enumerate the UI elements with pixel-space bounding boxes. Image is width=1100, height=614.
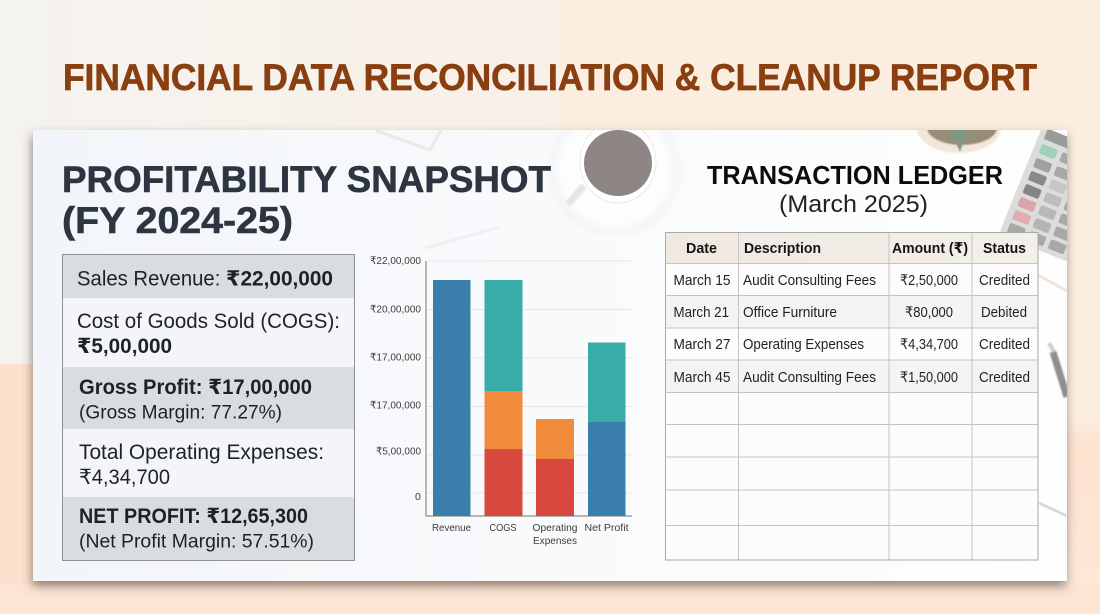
- table row: March 21: Office Furniture: [743, 305, 837, 321]
- table row: March 27: Operating Expenses: [743, 337, 864, 353]
- heading: profitability snapshot: PROFITABILITY SNAPSHOT: [62, 159, 551, 200]
- table row: March 27: Credited: [979, 337, 1030, 353]
- table header: Description: [744, 240, 821, 257]
- main panel: [33, 103, 1100, 581]
- bar chart: [370, 255, 632, 547]
- metric: gross profit: Gross Profit: ₹17,00,000: [79, 376, 312, 399]
- metric: gross profit: (Gross Margin: 77.27%): [79, 402, 282, 424]
- metric: cost of goods sold: Cost of Goods Sold (COGS):: [77, 310, 340, 333]
- table row: March 45: March 45: [674, 370, 730, 386]
- metric: cost of goods sold: ₹5,00,000: [77, 335, 172, 358]
- heading: transaction ledger: [707, 160, 1003, 218]
- table row: March 27: ₹4,34,700: [900, 337, 958, 353]
- bar: COGS: [484, 280, 522, 516]
- metric: net profit: NET PROFIT: ₹12,65,300: [79, 505, 308, 528]
- x axis labels: [432, 522, 629, 547]
- metric: cost of goods sold: [77, 310, 340, 358]
- y axis labels: ₹5,00,000: [376, 446, 421, 458]
- table row: March 21: [674, 305, 1027, 321]
- table row: March 15: [674, 273, 1030, 289]
- metric: sales revenue: Sales Revenue:: [77, 268, 226, 290]
- table row: March 45: ₹1,50,000: [900, 370, 958, 386]
- metric: sales revenue: ₹22,00,000: [226, 268, 333, 290]
- x axis labels: Operating: [532, 522, 578, 534]
- bar: operating expenses: [536, 419, 574, 516]
- table row: March 15: Audit Consulting Fees: [743, 273, 876, 289]
- panel: profitability metrics: [62, 254, 354, 560]
- heading: profitability snapshot: (FY 2024-25): [62, 200, 293, 241]
- bar: revenue: [433, 280, 470, 516]
- y axis labels: ₹22,00,000: [370, 255, 421, 267]
- icon: pen and paper: [1038, 275, 1067, 516]
- table row: March 45: Credited: [979, 370, 1030, 386]
- table row: March 45: Audit Consulting Fees: [743, 370, 876, 386]
- x axis labels: COGS: [490, 522, 516, 534]
- table: transaction ledger: [666, 232, 1038, 560]
- y axis labels: 0: [415, 491, 421, 503]
- x axis labels: Revenue: [432, 522, 471, 534]
- table header: Status: [983, 240, 1026, 257]
- title: FINANCIAL DATA RECONCILIATION & CLEANUP REPORT: [63, 57, 1037, 98]
- table row: March 15: ₹2,50,000: [900, 273, 958, 289]
- metric: total operating expenses: ₹4,34,700: [79, 466, 170, 489]
- y axis labels: [370, 255, 421, 503]
- metric: net profit: (Net Profit Margin: 57.51%): [79, 532, 314, 552]
- heading: transaction ledger: (March 2025): [779, 191, 928, 218]
- bar: net profit: [588, 342, 626, 516]
- y axis labels: ₹20,00,000: [370, 304, 421, 316]
- table row: March 15: March 15: [674, 273, 730, 289]
- table row: March 27: March 27: [674, 337, 730, 353]
- icon: calculator: [1000, 130, 1067, 261]
- icon: notebook corner: [375, 130, 500, 248]
- table row: March 21: March 21: [674, 305, 729, 321]
- desk photo decoration: [374, 130, 1067, 518]
- metric: total operating expenses: [79, 441, 324, 489]
- metric: gross profit: [79, 376, 312, 424]
- table row: March 15: Credited: [979, 273, 1030, 289]
- icon: coffee cup: [566, 130, 656, 206]
- table row: March 21: Debited: [981, 305, 1027, 321]
- x axis labels: Expenses: [533, 535, 577, 547]
- table row: March 21: ₹80,000: [905, 305, 953, 321]
- icon: potted plant: [916, 130, 1002, 154]
- table row: March 27: [674, 337, 1030, 353]
- x axis labels: Net Profit: [584, 522, 629, 534]
- heading: transaction ledger: TRANSACTION LEDGER: [707, 160, 1003, 190]
- metric: total operating expenses: Total Operating Expenses:: [79, 441, 324, 464]
- table row: March 45: [674, 370, 1030, 386]
- table header: Date: [686, 240, 717, 257]
- y axis labels: ₹17,00,000: [370, 352, 421, 364]
- metric: net profit: [79, 505, 314, 552]
- table header: Amount (₹): [892, 240, 968, 257]
- heading: profitability snapshot: [62, 159, 551, 241]
- y axis labels: ₹17,00,000: [370, 400, 421, 412]
- table header: [686, 240, 1026, 257]
- gridlines and axes: [426, 261, 632, 516]
